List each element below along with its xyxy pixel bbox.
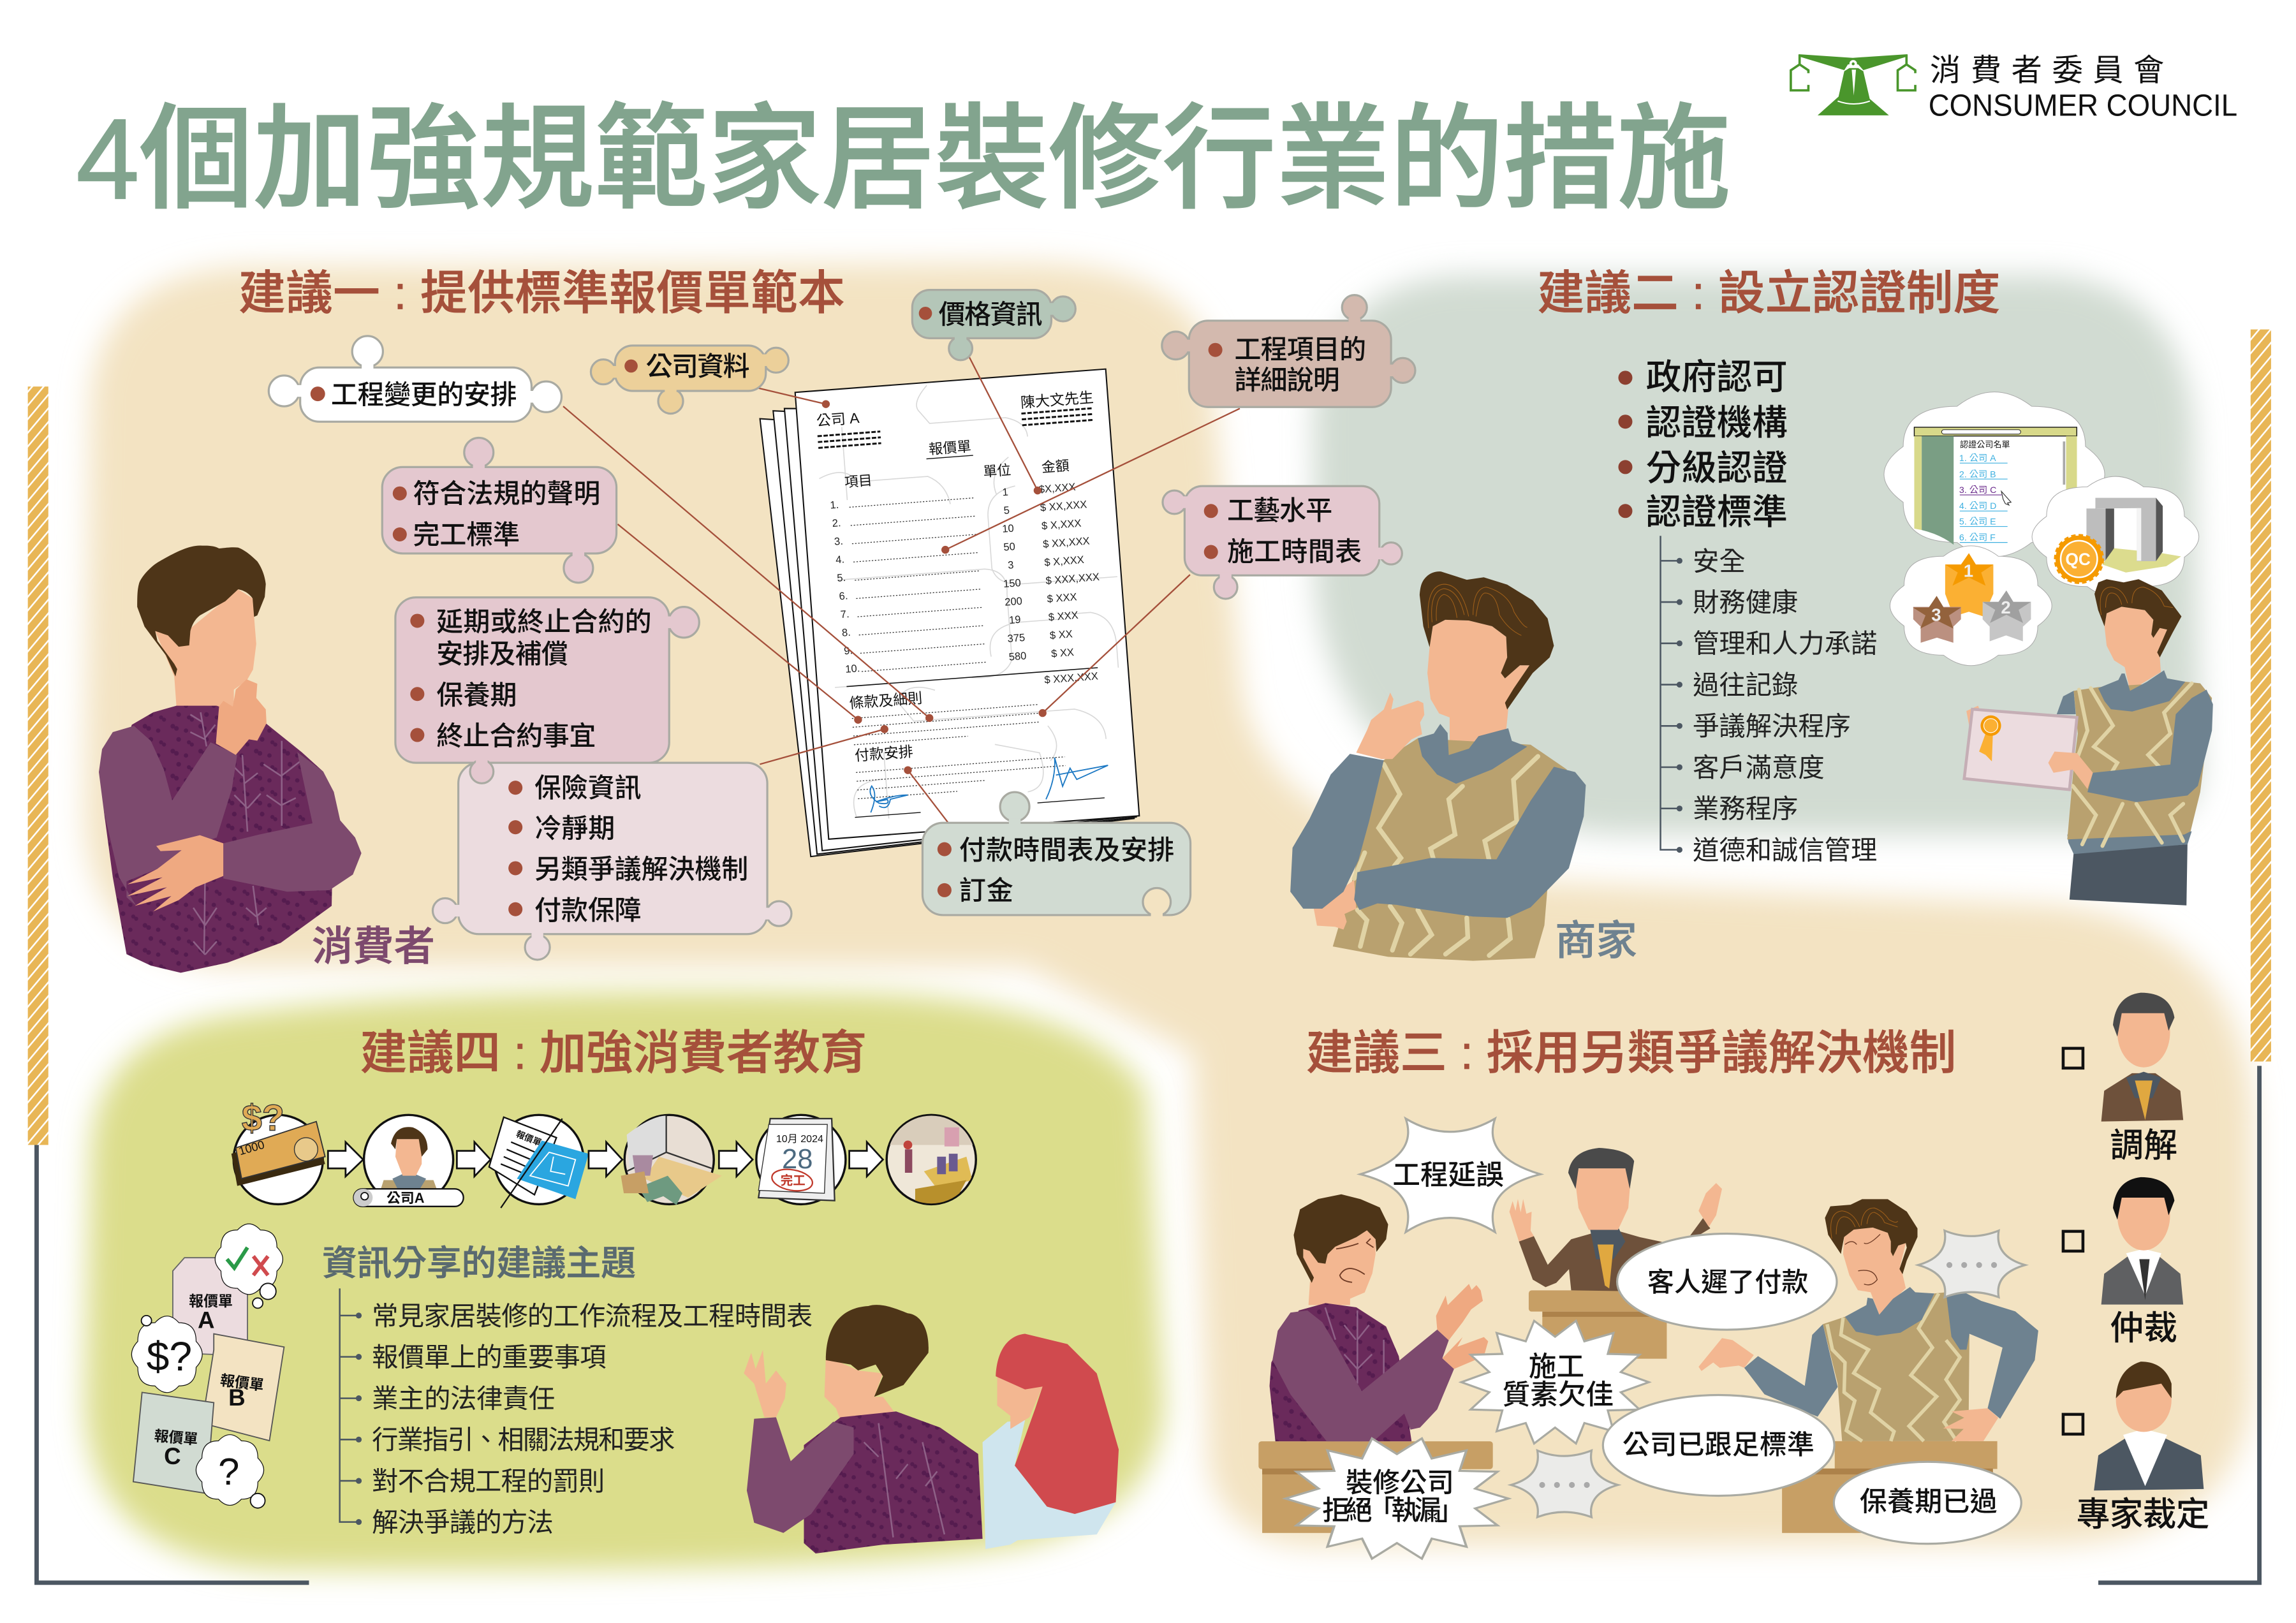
- step: calendar: 10月 2024: [776, 1133, 823, 1145]
- quotation rows: 6.: [839, 589, 848, 602]
- arrow: [850, 1142, 883, 1177]
- figure: consumer arguing: [1270, 1194, 1488, 1441]
- standards tree list: 過往記錄: [1693, 670, 1798, 700]
- subheading: topics: 資訊分享的建議主題: [322, 1244, 636, 1283]
- option: mediation: [2063, 993, 2183, 1164]
- quotation rows: 9.: [844, 644, 853, 657]
- speech bubble: late payment: [1617, 1234, 1837, 1330]
- quotation rows: $ XX: [1049, 628, 1073, 642]
- logo: Consumer Council: 消費者委員會: [1930, 53, 2164, 87]
- quotation rows: 10: [1002, 522, 1014, 535]
- topics tree list: 報價單上的重要事項: [372, 1343, 607, 1372]
- quotation comparison icons: [131, 1224, 284, 1508]
- callout: extension or termination: 延期或終止合約的: [436, 607, 652, 637]
- quotation comparison icons: A: [198, 1307, 214, 1333]
- thought bubble: accredited list: 3. 公司 C: [1959, 485, 1996, 496]
- connector lines: [563, 357, 1240, 823]
- quotation rows: $X,XXX: [1038, 481, 1076, 496]
- silent bubble: bottom: [1511, 1451, 1618, 1517]
- process flow: [232, 1098, 976, 1208]
- topics tree list: 常見家居裝修的工作流程及工程時間表: [372, 1302, 813, 1331]
- callout: workmanship and schedule: 工藝水平: [1227, 496, 1332, 525]
- standards tree list: 安全: [1693, 547, 1746, 576]
- quotation rows: $ XXX,XXX: [1045, 571, 1100, 587]
- document: quotation sample: 報價單: [928, 438, 972, 457]
- callout: extension or termination: 安排及補償: [436, 639, 568, 669]
- callout: payment schedule: 付款時間表及安排: [959, 835, 1174, 865]
- logo: Consumer Council: CONSUMER COUNCIL: [1929, 88, 2237, 122]
- quotation rows: $ XXX: [1048, 609, 1078, 623]
- topics tree list: 業主的法律責任: [372, 1384, 555, 1414]
- thought bubble: accredited list: 認證公司名單: [1960, 439, 2010, 449]
- thought bubble: QC approved: QC: [2065, 550, 2091, 569]
- step: calendar: 28: [782, 1144, 813, 1175]
- document: quotation sample: 金額: [1041, 457, 1070, 475]
- speech bubble: delay: [1360, 1119, 1540, 1232]
- callout: change arrangements: 工程變更的安排: [331, 380, 517, 410]
- callout: payment schedule: 訂金: [959, 876, 1013, 906]
- key points list: 認證機構: [1646, 403, 1788, 443]
- callout: extension or termination: 終止合約事宜: [436, 721, 596, 751]
- heading 1: 建議一 : 提供標準報價單範本: [239, 266, 845, 319]
- topics tree list: 解決爭議的方法: [372, 1508, 554, 1538]
- quotation rows: 2.: [832, 517, 841, 529]
- arrow: [457, 1142, 490, 1177]
- callout: price info: 價格資訊: [939, 299, 1043, 329]
- callout: price info: [912, 290, 1075, 360]
- figure: mediator at desk: [1510, 1148, 1722, 1291]
- figure: merchant with certificate: [1964, 579, 2213, 906]
- title: 4個加強規範家居裝修行業的措施: [76, 95, 1731, 223]
- callout: work item details: 工程項目的: [1234, 334, 1366, 364]
- callout: workmanship and schedule: [1163, 486, 1402, 599]
- quotation rows: [830, 480, 1105, 675]
- speech bubble: delay: 工程延誤: [1392, 1160, 1504, 1191]
- document: quotation sample: $ XXX,XXX: [1044, 670, 1098, 686]
- figure: merchant arguing: [1698, 1199, 2038, 1441]
- document: quotation sample: 陳大文先生: [1020, 389, 1094, 411]
- quotation rows: 7.: [840, 608, 850, 621]
- quotation rows: 375: [1007, 631, 1026, 645]
- quotation rows: 3.: [834, 535, 843, 548]
- label: merchant: 商家: [1555, 918, 1637, 964]
- key points list: [1618, 358, 1788, 532]
- standards tree list: [1661, 536, 1877, 865]
- quotation rows: 8.: [841, 626, 851, 639]
- standards tree list: 道德和誠信管理: [1693, 835, 1877, 865]
- speech bubble: leak repair refused: [1285, 1439, 1508, 1559]
- panel: recommendation 3: [1258, 993, 2210, 1559]
- thought bubble: QC approved: [2032, 476, 2199, 597]
- arrow: [719, 1142, 753, 1177]
- thought bubble: accredited list: 2. 公司 B: [1959, 469, 1996, 480]
- speech bubble: poor quality: 施工: [1529, 1352, 1584, 1383]
- document: quotation sample: 公司 A: [816, 409, 860, 429]
- callout: insurance and cooling-off: 另類爭議解決機制: [534, 855, 748, 885]
- option: mediation: 調解: [2110, 1127, 2177, 1164]
- thought bubble: grading stars: 2: [2001, 598, 2011, 617]
- thought bubble: accredited list: 6. 公司 F: [1959, 532, 1996, 543]
- topics tree list: [340, 1288, 813, 1538]
- panel: recommendation 4: [131, 1026, 1119, 1553]
- speech bubble: leak repair refused: 裝修公司: [1346, 1468, 1454, 1498]
- speech bubble: poor quality: 質素欠佳: [1503, 1380, 1614, 1411]
- step: quotation and floor plan: 報價單: [515, 1129, 543, 1148]
- callout: compliance statement: 完工標準: [413, 520, 520, 550]
- heading 2: 建議二 : 設立認證制度: [1538, 266, 2000, 319]
- key points list: 認證標準: [1646, 492, 1788, 532]
- quotation comparison icons: ?: [218, 1450, 239, 1493]
- thought bubble: grading stars: [1890, 546, 2052, 666]
- step: renovation tools: [621, 1115, 722, 1205]
- callout: change arrangements: [269, 336, 561, 422]
- quotation rows: 1: [1002, 486, 1008, 498]
- speech bubble: warranty expired: [1834, 1462, 2021, 1544]
- callout: extension or termination: 保養期: [436, 680, 517, 710]
- logo: Consumer Council: [1791, 53, 2237, 122]
- quotation comparison icons: 報價單: [189, 1293, 233, 1309]
- document: quotation sample: 單位: [983, 462, 1012, 480]
- desk: left: [1258, 1441, 1493, 1533]
- step: calendar: 完工: [781, 1173, 806, 1187]
- step: calendar: [756, 1115, 846, 1204]
- key points list: 分級認證: [1646, 448, 1788, 488]
- document: quotation sample: 項目: [844, 472, 872, 490]
- thought bubble: grading stars: 1: [1964, 561, 1973, 581]
- heading 3: 建議三 : 採用另類爭議解決機制: [1306, 1026, 1956, 1079]
- callout: insurance and cooling-off: 保險資訊: [534, 773, 642, 803]
- thought bubble: grading stars: 3: [1931, 605, 1941, 624]
- quotation rows: $ X,XXX: [1041, 517, 1082, 532]
- step: money: [232, 1098, 325, 1204]
- quotation rows: 10.: [845, 662, 860, 675]
- quotation rows: 1.: [830, 499, 839, 511]
- quotation comparison icons: 報價單: [219, 1372, 265, 1393]
- quotation comparison icons: C: [164, 1443, 181, 1469]
- step: company search: 公司A: [386, 1190, 425, 1206]
- figure: merchant thinking: [1290, 571, 1586, 961]
- thought bubble: accredited list: 1. 公司 A: [1959, 453, 1996, 464]
- quotation rows: $ XX: [1050, 646, 1075, 660]
- speech bubble: standards met: 公司已跟足標準: [1623, 1430, 1814, 1460]
- speech bubble: standards met: [1603, 1395, 1834, 1495]
- heading 4: 建議四 : 加強消費者教育: [360, 1026, 867, 1079]
- quotation comparison icons: B: [228, 1384, 246, 1411]
- standards tree list: 業務程序: [1693, 795, 1798, 824]
- thought bubble: accredited list: [1884, 392, 2105, 557]
- callout: company info: [591, 346, 788, 414]
- topics tree list: 行業指引、相關法規和要求: [372, 1425, 675, 1455]
- callout: workmanship and schedule: 施工時間表: [1227, 536, 1362, 566]
- figure: consumer: [99, 546, 362, 973]
- figure: man with OK gesture: [744, 1305, 983, 1553]
- speech bubble: leak repair refused: 拒絕「執漏」: [1322, 1495, 1464, 1525]
- quotation comparison icons: $?: [147, 1333, 192, 1379]
- arrow: [328, 1142, 363, 1177]
- step: money: $?: [242, 1098, 284, 1138]
- callout: insurance and cooling-off: 冷靜期: [534, 813, 615, 843]
- silent bubble: top: [1918, 1231, 2025, 1297]
- panel: recommendation 1: [99, 266, 1415, 973]
- panel: recommendation 2: [1290, 266, 2213, 964]
- speech bubble: late payment: 客人遲了付款: [1647, 1267, 1808, 1297]
- step: finished home: [887, 1115, 976, 1208]
- callout: compliance statement: 符合法規的聲明: [413, 479, 600, 509]
- document: quotation sample: [760, 369, 1139, 856]
- quotation rows: 5: [1003, 504, 1010, 517]
- desk: right: [1782, 1441, 1998, 1533]
- quotation rows: 4.: [835, 553, 845, 566]
- quotation rows: 580: [1008, 650, 1027, 663]
- quotation rows: 200: [1004, 595, 1023, 608]
- callout: extension or termination: [395, 598, 699, 763]
- step: company search: [353, 1115, 464, 1208]
- step: money: 1000: [237, 1138, 266, 1157]
- standards tree list: 財務健康: [1693, 588, 1798, 617]
- option: expert determination: [2063, 1362, 2210, 1533]
- quotation rows: $ X,XXX: [1044, 554, 1084, 568]
- key points list: 政府認可: [1646, 358, 1788, 397]
- topics tree list: 對不合規工程的罰則: [372, 1467, 605, 1496]
- standards tree list: 爭議解決程序: [1693, 712, 1851, 741]
- callout: insurance and cooling-off: 付款保障: [534, 895, 642, 925]
- callout: payment schedule: [922, 792, 1191, 918]
- option: arbitration: 仲裁: [2110, 1310, 2177, 1348]
- thought bubble: accredited list: 5. 公司 E: [1959, 517, 1996, 527]
- quotation rows: 5.: [837, 571, 846, 584]
- callout: insurance and cooling-off: [432, 758, 791, 960]
- callout: compliance statement: [382, 437, 617, 583]
- quotation rows: $ XX,XXX: [1043, 534, 1090, 550]
- background panels: [85, 263, 2252, 1570]
- quotation rows: $ XXX: [1047, 591, 1077, 605]
- quotation rows: 50: [1003, 540, 1015, 554]
- quotation rows: $ XX,XXX: [1040, 498, 1087, 514]
- quotation comparison icons: 報價單: [154, 1427, 198, 1448]
- speech bubble: poor quality: [1461, 1321, 1649, 1444]
- arrow: [589, 1142, 622, 1177]
- quotation rows: 150: [1003, 576, 1021, 590]
- callout: work item details: [1162, 295, 1415, 407]
- document: quotation sample: 條款及細則: [849, 689, 923, 712]
- quotation rows: 19: [1008, 613, 1021, 626]
- quotation rows: 3: [1007, 559, 1014, 571]
- option: expert determination: 專家裁定: [2077, 1495, 2210, 1533]
- step: quotation and floor plan: [489, 1115, 589, 1208]
- speech bubble: warranty expired: 保養期已過: [1860, 1487, 1998, 1517]
- standards tree list: 客戶滿意度: [1693, 753, 1825, 782]
- label: consumer: 消費者: [312, 923, 435, 969]
- callout: work item details: 詳細說明: [1234, 365, 1340, 395]
- option: arbitration: [2063, 1177, 2183, 1348]
- document: quotation sample: 付款安排: [854, 743, 914, 764]
- decorative hatched bars: [28, 330, 2271, 1145]
- callout: company info: 公司資料: [646, 351, 750, 381]
- standards tree list: 管理和人力承諾: [1693, 629, 1877, 659]
- desk: center: [1529, 1290, 1667, 1359]
- thought bubble: accredited list: 4. 公司 D: [1959, 501, 1996, 511]
- frame corners: [36, 1066, 2260, 1583]
- figure: woman with red hair: [983, 1334, 1119, 1549]
